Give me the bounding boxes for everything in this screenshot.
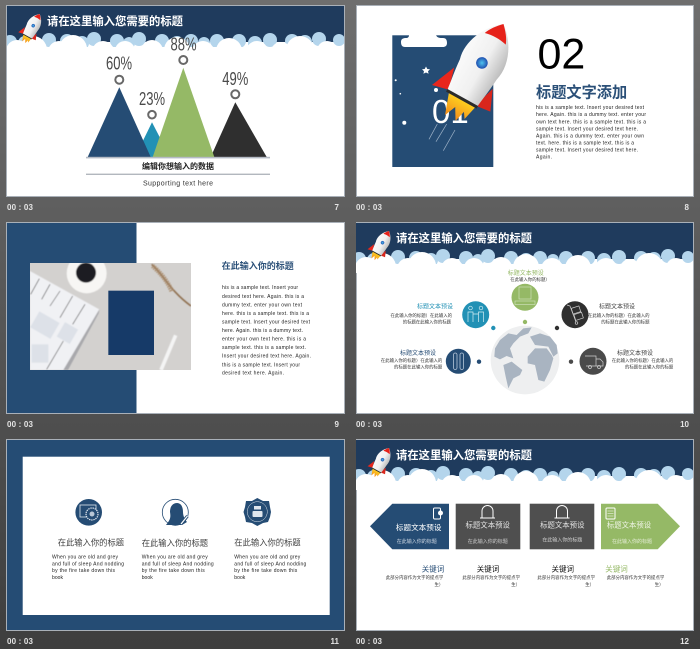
keyword 3: 此部分内容作为文字的提点学 [537,574,596,581]
keyword 2: 此部分内容作为文字的提点学 [462,574,521,581]
footer slide 11 [7,637,340,646]
column 1: and full of sleep And nodding [52,562,124,568]
icon: screen and gear [75,499,102,526]
node: navy tools: 标题文本预设 [400,349,436,357]
body text: desired text here. Again. this is a [222,294,304,300]
node: top green: 标题文本预设 [508,269,544,277]
step 2: grey box [456,504,520,549]
node: navy tools [381,349,481,374]
step 4: green arrow [601,504,680,549]
body text: enter your own text here. this is a [222,336,306,342]
chart: mountains [86,35,270,158]
icon: globe [491,326,559,394]
body text: dummy text. enter your own text [222,302,303,308]
body text: here. Again. this is a dummy text. enter your [536,112,646,118]
body text [222,285,311,377]
footer slide 9: 9 [335,420,340,429]
node: black hand truck: 的标题在此输入你的标题 [601,318,650,325]
keyword 1: 生） [435,581,443,587]
body text: his is a sample text. Insert your [222,285,298,291]
footer slide 8 [356,203,690,212]
body text [536,105,646,160]
body text: his is a sample text. Insert your desired text [536,105,645,111]
column 1: by the fire take down this [52,568,116,574]
slide 10: globe diagram [352,222,694,414]
column 3 [234,498,307,581]
keyword 1: 此部分内容作为文字的提点学 [386,574,444,581]
blue side panel [7,223,136,413]
photo: desk with notebook [30,253,191,370]
column 3: by the fire take down this [234,568,298,574]
body text: sample text. Insert your desired text here. [536,126,638,132]
keyword 4 [605,564,665,587]
header banner with clouds [352,223,694,281]
icon: person with pencil [162,499,188,525]
body text: sample text. Insert your desired text [222,320,311,326]
body text: this is a sample text. Insert your [222,362,300,368]
keyword 4: 关键词 [605,564,628,574]
keyword 4: 生） [655,581,664,587]
section heading: 标题文字添加 [536,84,627,102]
footer slide 8: 00 : 03 [356,203,383,212]
column 1: When you are old and grey [52,554,118,560]
body text: text. here. this is a sample text. this is a [536,140,634,146]
node: grey truck: 标题文本预设 [617,349,653,357]
keyword 1: 关键词 [422,564,444,574]
slide 8: rocket and section 02 [356,6,694,196]
body text: sample text. Insert your desired text here. [536,148,638,154]
footer slide 8: 8 [685,203,690,212]
big number: 02 [538,30,585,78]
step 1: navy arrow: 在此输入你的标题 [397,538,437,545]
keyword 3: 关键词 [552,564,574,574]
node: grey truck [569,348,674,375]
node: teal people: 在此输入你的标题）在此输入的 [391,312,453,319]
node: grey truck: 在此输入你的标题）在此输入的 [612,357,674,364]
card with rocket [392,8,531,167]
footer slide 9: 00 : 03 [7,420,34,429]
body text: desired text here. Again. [222,371,284,377]
column 3: 在此输入你的标题 [234,537,301,547]
node: top green [508,269,550,324]
slide 9: photo and text [6,222,344,414]
body text: Again. this is a dummy text. enter your own [536,134,644,140]
step 1: navy arrow [370,504,449,549]
node: grey truck: 的标题在此输入你的标题 [625,363,674,370]
node: navy tools: 的标题在此输入你的标题 [394,363,443,370]
column 1 [52,499,124,581]
node: teal people: 标题文本预设 [417,302,453,310]
header banner with clouds [3,6,345,64]
column 2: by the fire take down this [142,568,205,574]
body text: own text here. this is a sample text. this is a [536,119,646,125]
column 3: When you are old and grey [234,554,301,560]
keyword 3 [537,564,596,587]
header banner with clouds [352,440,694,498]
footer slide 7: 00 : 03 [7,203,34,212]
column 3: book [234,575,246,581]
icon: badge [244,498,271,526]
body text: Again. [536,154,552,160]
chart: mountains: 23% [139,89,165,109]
step 2: grey box: 在此输入你的标题 [468,538,508,545]
header banner with clouds: 请在这里输入您需要的标题 [396,231,532,245]
node: black hand truck: 标题文本预设 [599,302,635,310]
footer slide 7 [7,203,340,212]
keyword 1 [386,564,444,587]
step 3: grey box: 在此输入你的标题 [542,536,582,543]
column 2 [142,499,214,581]
keyword 2 [462,564,521,587]
keyword 2: 关键词 [477,564,499,574]
node: teal people: 的标题在此输入你的标题 [403,318,452,325]
header banner with clouds: 请在这里输入您需要的标题 [396,448,532,462]
column 3: and full of sleep And nodding [234,562,307,568]
column 2: 在此输入你的标题 [142,538,208,548]
slide 7: mountain percent chart [3,6,345,196]
step 4: green arrow: 标题文本预设 [607,520,652,530]
chart caption [86,161,270,188]
footer slide 11: 00 : 03 [7,637,34,646]
keyword 4: 此部分内容作为文字的提点学 [607,574,665,581]
node: black hand truck [555,301,650,330]
node: navy tools: 在此输入你的标题）在此输入的 [381,357,443,364]
footer slide 12: 00 : 03 [356,637,383,646]
step 3: grey box [530,504,594,549]
footer slide 12 [356,637,690,646]
chart: mountains: 88% [170,35,196,55]
keyword 2: 生） [511,581,520,587]
slide 12: four process arrows [352,440,694,630]
step 4: green arrow: 在此输入你的标题 [612,538,652,545]
body text: Insert your desired text here. Again. [222,353,311,359]
chart: mountains: 49% [222,69,248,89]
footer slide 10 [356,420,690,429]
footer slide 11: 11 [331,637,340,646]
footer slide 9 [7,420,340,429]
chart caption: Supporting text here [143,180,213,188]
heading: 在此输入你的标题 [222,260,294,271]
body text: sample text. this is a sample text. [222,345,306,351]
node: black hand truck: 在此输入你的标题）在此输入的 [588,312,650,319]
footer slide 12: 12 [680,637,690,646]
step 2: grey box: 标题文本预设 [466,520,510,530]
column 2: and full of sleep And nodding [142,562,214,568]
node: teal people [391,301,495,330]
keyword 3: 生） [585,581,594,587]
node: top green: 在此输入你的标题） [510,276,550,283]
column 1: 在此输入你的标题 [58,537,124,547]
column 2: When you are old and grey [142,554,208,560]
slide 11: three icon columns [6,440,344,630]
footer slide 10: 00 : 03 [356,420,383,429]
footer slide 10: 10 [680,420,690,429]
body text: here. this is a sample text. this is a [222,311,309,317]
header banner with clouds: 请在这里输入您需要的标题 [47,14,183,28]
step 1: navy arrow: 标题文本预设 [396,522,442,532]
chart caption: 编辑你想输入的数据 [142,161,214,171]
chart: mountains: 60% [106,54,132,74]
card with rocket: 01 [432,93,469,130]
white inner panel [23,457,330,615]
column 1: book [52,575,64,581]
footer slide 7: 7 [335,203,340,212]
body text: here. Again. this is a dummy text. [222,328,303,334]
column 2: book [142,575,153,581]
step 3: grey box: 标题文本预设 [540,520,585,530]
